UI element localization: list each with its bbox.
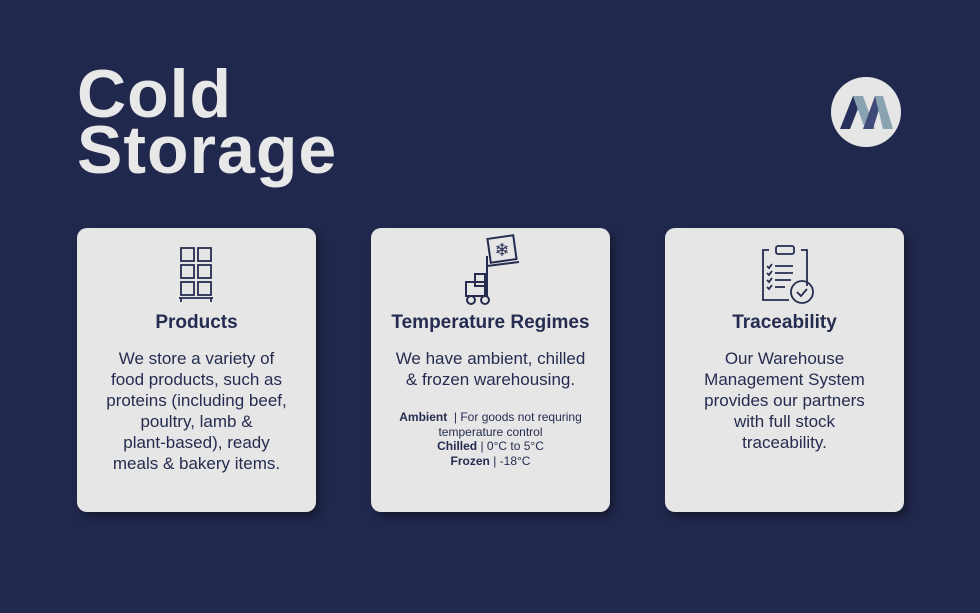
text: poultry, lamb &	[140, 412, 253, 431]
text: plant-based), ready	[123, 433, 270, 452]
text: Management System	[704, 370, 865, 389]
text: We have ambient, chilled	[396, 349, 585, 368]
text: provides our partners	[704, 391, 865, 410]
icon: forklift	[465, 234, 520, 305]
text	[704, 349, 865, 452]
text: & frozen warehousing.	[406, 370, 575, 389]
text	[396, 349, 585, 389]
icon: clipboard	[762, 245, 814, 304]
temperature list: temperature control	[438, 424, 543, 438]
panel: temperature regimes	[371, 228, 610, 512]
heading: Traceability	[732, 312, 837, 333]
text: proteins (including beef,	[106, 391, 287, 410]
temperature list: Frozen | -18°C	[451, 454, 530, 468]
text: with full stock	[734, 412, 835, 431]
title: Storage	[77, 112, 337, 188]
text: food products, such as	[111, 370, 282, 389]
text: We store a variety of	[119, 349, 274, 368]
text: Our Warehouse	[725, 349, 844, 368]
icon: boxes	[179, 247, 213, 302]
title	[77, 56, 337, 188]
heading: Temperature Regimes	[391, 312, 590, 333]
temperature list: Ambient | For goods not requring	[399, 410, 582, 424]
heading: Products	[155, 312, 238, 333]
text: meals & bakery items.	[113, 454, 280, 473]
title: Cold	[77, 56, 232, 132]
temperature list: Chilled | 0°C to 5°C	[437, 439, 544, 453]
text: traceability.	[742, 433, 827, 452]
panel: products	[77, 228, 316, 512]
panel: traceability	[665, 228, 904, 512]
icon: forklift: ❄	[494, 240, 510, 260]
text	[106, 349, 287, 473]
logo	[831, 77, 901, 147]
temperature list	[399, 410, 582, 468]
